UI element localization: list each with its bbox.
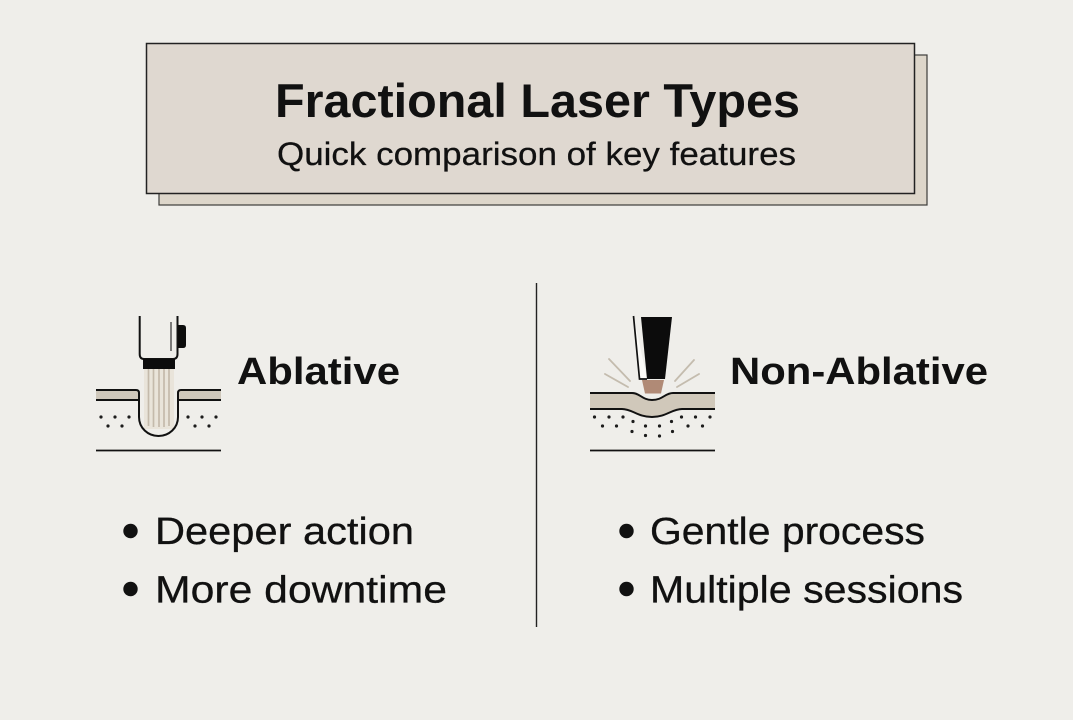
divider between columns (536, 283, 538, 627)
header shadow card (159, 55, 927, 205)
skin band left (96, 390, 138, 400)
panel: ablative (96, 316, 447, 612)
skin band right (179, 390, 221, 400)
icon: ablative handpiece and skin channel (96, 316, 221, 450)
bullet list: non-ablative (619, 511, 963, 612)
icon: non-ablative tip and skin dip (590, 316, 715, 450)
bullet: multiple sessions: Multiple sessions (650, 570, 963, 612)
tip white sleeve (634, 316, 647, 379)
base line (590, 450, 715, 452)
header front card (146, 44, 914, 194)
handpiece body (140, 316, 178, 359)
handpiece nozzle (143, 359, 175, 369)
heading: ablative: Ablative (237, 351, 400, 393)
base line (96, 450, 221, 452)
handpiece inner line (170, 322, 172, 351)
energy rays (605, 359, 699, 387)
bullet: deeper action: Deeper action (155, 511, 414, 553)
title: Fractional Laser Types (275, 74, 800, 127)
tip black body (641, 317, 672, 379)
bullet: gentle process: Gentle process (650, 511, 925, 553)
handpiece side button (178, 325, 186, 348)
subtitle: Quick comparison of key features (277, 136, 796, 172)
tissue dots (593, 415, 712, 438)
tip copper emitter (642, 380, 664, 394)
laser beam glow (144, 369, 174, 429)
skin outlines (590, 393, 715, 417)
tissue dots (99, 415, 218, 428)
panel: non-ablative (590, 316, 988, 612)
bullet list: ablative (123, 511, 447, 612)
heading: non-ablative: Non-Ablative (730, 351, 988, 393)
beam lines (148, 369, 169, 427)
header panel (146, 44, 927, 205)
skin band (590, 393, 715, 417)
skin outline and channel (96, 390, 221, 436)
bullet: more downtime: More downtime (155, 570, 447, 612)
